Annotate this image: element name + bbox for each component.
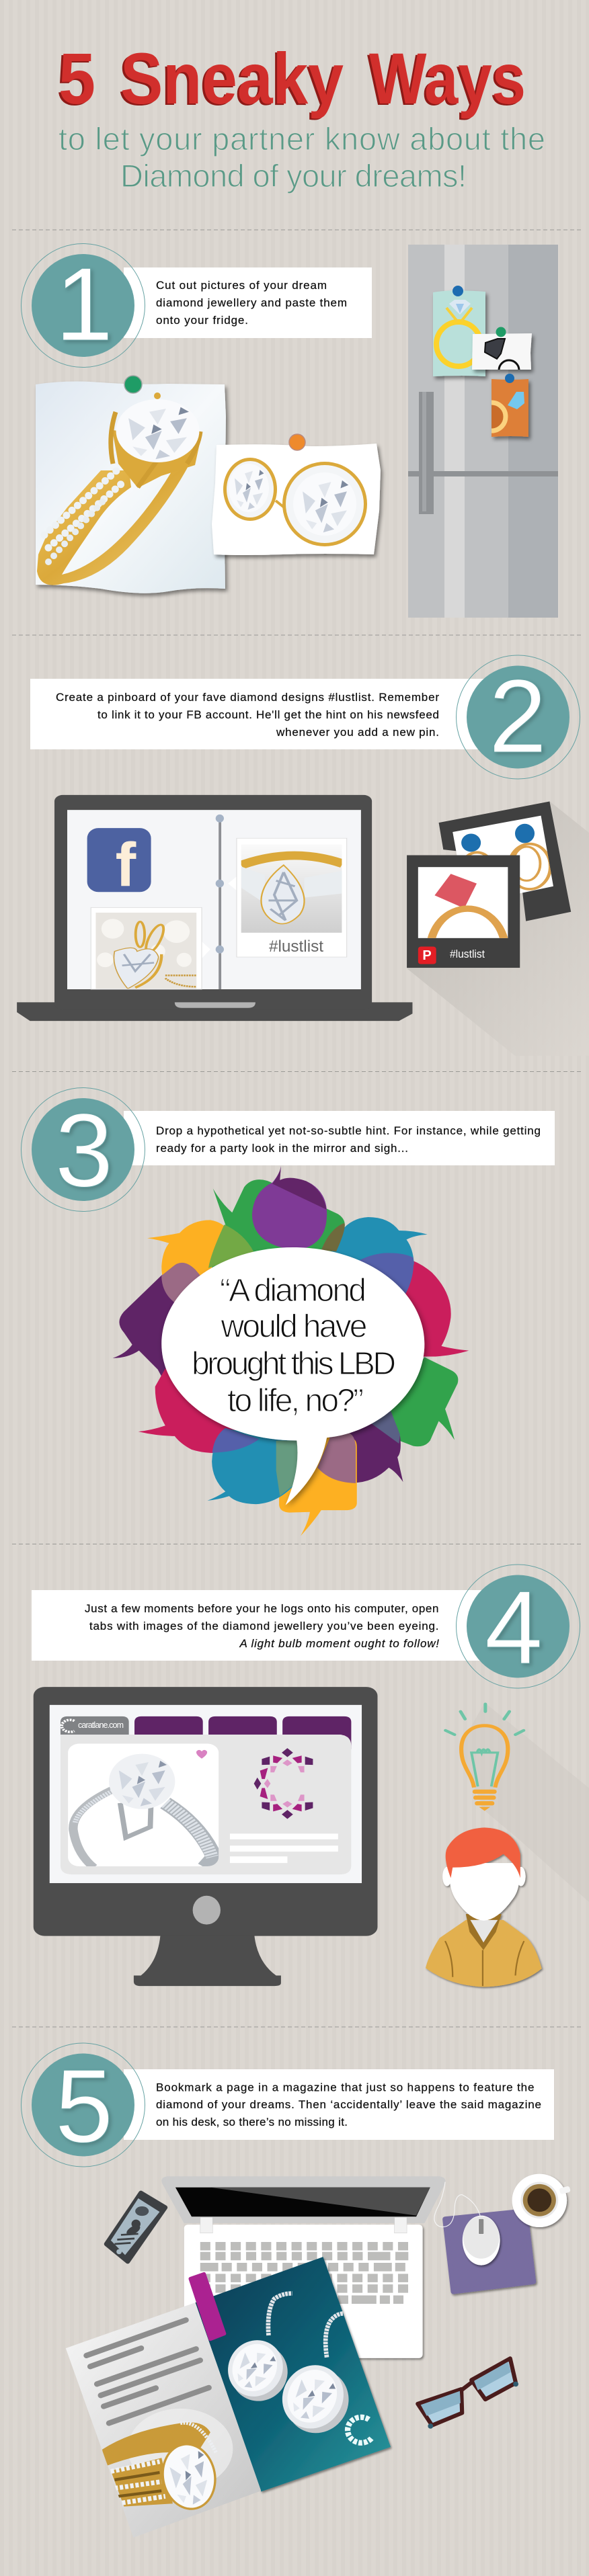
- icon: light bulb: [446, 1704, 524, 1811]
- purple top dark cap: [272, 1166, 327, 1210]
- bubble: purple top: [252, 1166, 327, 1250]
- step 4 text band: [32, 1590, 485, 1661]
- icon: pinterest: P: [422, 948, 432, 963]
- main white quote bubble: [161, 1247, 424, 1505]
- panel: step 4: [32, 1565, 589, 1987]
- pin: blue 2: [505, 374, 514, 383]
- overlap: indigo bottom: [212, 1428, 260, 1452]
- title: Ways: [369, 38, 526, 119]
- title: 5: [58, 38, 95, 119]
- step 2 number badge: [456, 655, 580, 779]
- step 1 text band: [124, 267, 372, 338]
- bubble: dark purple bottom right: [315, 1419, 403, 1483]
- fridge: [408, 245, 558, 618]
- pin: blue 1: [453, 286, 463, 296]
- step 5 text band: diamond of your dreams. Then ‘accidentally’ leave the said magazine: [156, 2098, 541, 2111]
- long shadow of bulb and person: [460, 1702, 589, 1902]
- tab label: caratlane.com: [78, 1720, 124, 1730]
- pin: orange: [289, 434, 305, 450]
- long shadow of polaroids: [407, 801, 589, 1056]
- panel: step 3: [22, 1087, 555, 1536]
- pin: green 2: [496, 327, 506, 337]
- white C logo: [348, 2417, 372, 2443]
- subtitle: Diamond of your dreams!: [120, 158, 467, 194]
- fridge note: black ring: [472, 333, 532, 380]
- coffee cup: [512, 2174, 571, 2227]
- bubble: yellow upper left: [147, 1220, 237, 1301]
- step 4 text band: Just a few moments before your he logs onto his computer, open: [85, 1602, 438, 1615]
- title: 5: [56, 39, 93, 120]
- title: [56, 38, 526, 120]
- monitor screen: [50, 1705, 362, 1883]
- bookmark: [190, 2274, 225, 2339]
- step 3 number badge: 3: [55, 1092, 113, 1208]
- step 5 number badge: 5: [55, 2048, 113, 2164]
- browser page: [61, 1735, 351, 1874]
- step 2 text band: to link it to your FB account. He'll get the hint on his newsfeed: [97, 708, 439, 721]
- section dividers: [12, 230, 582, 2027]
- step 3 number badge: [22, 1087, 145, 1211]
- gold ring photo: [102, 2409, 233, 2514]
- small tab logo: [62, 1720, 75, 1732]
- step 5 text band: on his desk, so there’s no missing it.: [156, 2116, 348, 2128]
- photo: diamond stud earrings note: [212, 444, 381, 555]
- overlap: olive green: [208, 1224, 253, 1268]
- step 4 number badge: 4: [485, 1569, 543, 1686]
- step 4 number badge: [456, 1565, 580, 1688]
- monitor stand: [134, 1935, 281, 1986]
- speech bubble cluster: [113, 1166, 469, 1536]
- subtitle: to let your partner know about the: [58, 121, 545, 157]
- overlap: indigo right: [359, 1253, 414, 1294]
- photo: gold diamond ring note: [36, 382, 226, 593]
- browser tabs: [61, 1716, 351, 1749]
- quote text: would have: [221, 1309, 367, 1344]
- step 1 number badge: [22, 243, 145, 367]
- overlap: mauve: [161, 1263, 203, 1304]
- bubble: green right: [376, 1357, 458, 1446]
- step 5 number badge: [22, 2043, 145, 2167]
- product text bars: [230, 1833, 338, 1863]
- step 5 text band: Bookmark a page in a magazine that just so happens to feature the: [156, 2081, 534, 2094]
- icon: facebook: f: [116, 831, 136, 899]
- step 2 text band: Create a pinboard of your fave diamond designs #lustlist. Remember: [56, 691, 439, 704]
- fridge note: orange card: [491, 379, 533, 442]
- earring right: [272, 2313, 359, 2443]
- bubble: crimson right: [376, 1255, 469, 1357]
- title: Sneaky: [118, 39, 342, 120]
- title: Sneaky: [120, 38, 344, 119]
- step 4 text band: A light bulb moment ought to follow!: [239, 1637, 439, 1650]
- bubble: green top: [210, 1179, 345, 1273]
- caratlane brand logo: [254, 1748, 313, 1819]
- polaroids: [407, 801, 572, 968]
- magazine text bars: [87, 2320, 209, 2423]
- open laptop: [161, 2176, 446, 2358]
- title: Ways: [367, 39, 524, 120]
- quote text: “A diamond: [220, 1273, 366, 1308]
- panel: step 5: [22, 2043, 571, 2538]
- glasses: [418, 2358, 518, 2429]
- bubble: yellow bottom: [279, 1438, 357, 1536]
- step 2 number badge: 2: [489, 658, 547, 774]
- earring left: [219, 2293, 297, 2410]
- pin caption: #lustlist: [269, 938, 323, 956]
- polaroid caption: #lustlist: [450, 948, 485, 960]
- laptop and screen: [17, 795, 412, 1021]
- step 3 text band: ready for a party look in the mirror and sigh...: [156, 1142, 408, 1155]
- bubble: crimson bottom left: [139, 1368, 270, 1453]
- person illustration: [426, 1827, 542, 1987]
- step 3 text band: Drop a hypothetical yet not-so-subtle hint. For instance, while getting: [156, 1124, 541, 1137]
- desktop monitor: [34, 1687, 377, 1986]
- mouse cable: [434, 2182, 481, 2227]
- step 1 text band: Cut out pictures of your dream: [156, 279, 327, 292]
- quote text: to life, no?”: [227, 1383, 364, 1419]
- phone: [106, 2193, 165, 2261]
- overlap: olive brown: [321, 1223, 345, 1251]
- mouse pad: [445, 2211, 533, 2292]
- pin: green: [124, 376, 142, 393]
- step 1 text band: onto your fridge.: [156, 314, 248, 327]
- quote text: brought this LBD: [192, 1346, 396, 1382]
- mouse: [463, 2216, 500, 2266]
- overlap: mauve bottom: [317, 1433, 356, 1483]
- panel: step 2: [17, 655, 589, 1056]
- magazine: [66, 2257, 391, 2538]
- step 2 text band: [30, 679, 485, 749]
- bubble: blue bottom: [207, 1429, 297, 1504]
- bubble: dark purple left: [113, 1262, 199, 1384]
- person and bulb: [426, 1702, 589, 1987]
- fridge note: yellow ring: [433, 290, 485, 376]
- monitor body: [34, 1687, 377, 1936]
- panel: step 1: [22, 243, 558, 618]
- quote text: [192, 1273, 396, 1419]
- step 3 text band: [124, 1111, 555, 1165]
- product card with silver ring: [68, 1743, 219, 1868]
- step 4 text band: tabs with images of the diamond jewellery you’ve been eyeing.: [89, 1620, 438, 1632]
- subtitle: [58, 121, 545, 194]
- step 1 text band: diamond jewellery and paste them: [156, 296, 347, 309]
- overlap: slate: [370, 1411, 400, 1444]
- step 1 number badge: 1: [55, 246, 113, 362]
- step 5 text band: [124, 2069, 554, 2140]
- bubble: blue right: [331, 1217, 428, 1294]
- step 2 text band: whenever you add a new pin.: [276, 726, 439, 739]
- desk scene: [66, 2174, 571, 2538]
- overlap: grey green: [276, 1441, 301, 1496]
